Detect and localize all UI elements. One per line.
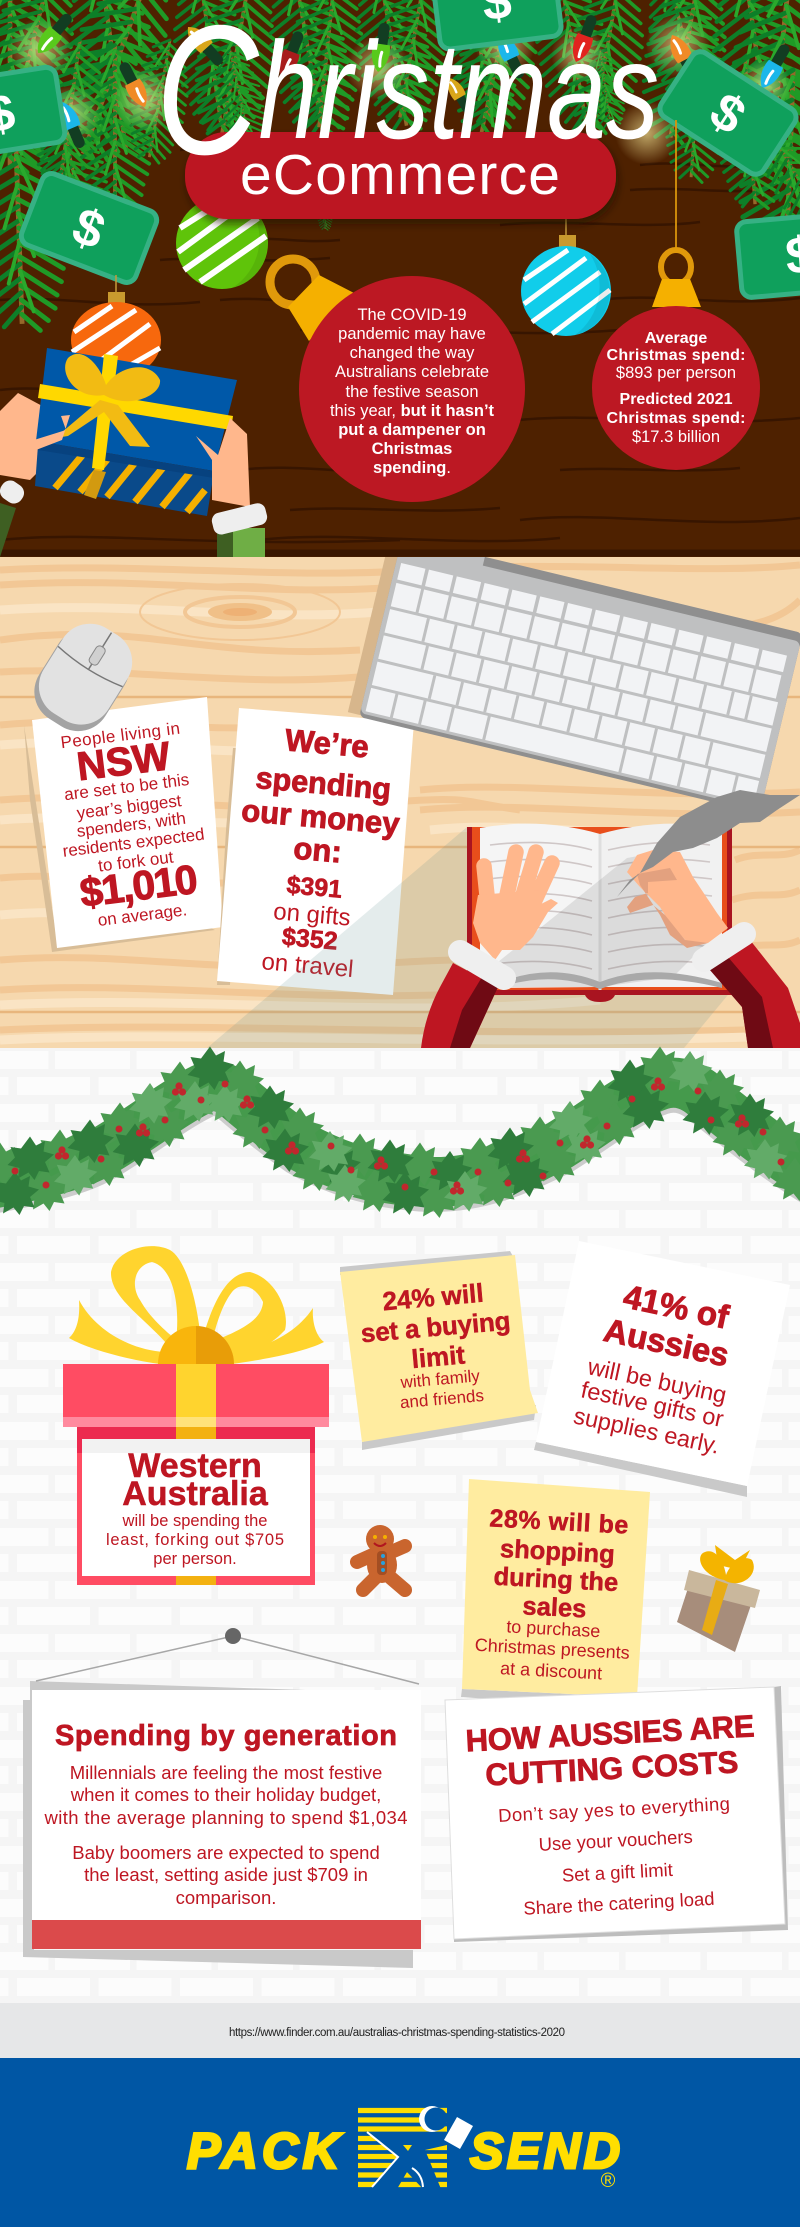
note: we're spending our money on: spending (254, 761, 392, 807)
sticky note: 28% shopping during sales: Christmas presents (474, 1635, 630, 1663)
note: we're spending our money on: $352 (281, 923, 339, 956)
gift box: Western Australia: least, forking out $705 (106, 1531, 284, 1549)
hanging sign: spending by generation: with the average planning to spend $1,034 (44, 1807, 408, 1828)
note: we're spending our money on: on travel (260, 948, 355, 983)
source bar (0, 2003, 800, 2058)
hanging sign: spending by generation (23, 1628, 421, 1968)
note: 41% of Aussies (534, 1241, 790, 1497)
title script: hristmas (259, 15, 659, 168)
mouse (22, 611, 145, 743)
sticky note: 24% buying limit: limit (410, 1339, 466, 1374)
ornament: COVID-19 message: the festive season (346, 383, 478, 401)
hanging sign: spending by generation: the least, setting aside just $709 in (84, 1864, 368, 1885)
note: NSW biggest spenders: on average. (97, 900, 188, 930)
gingerbread man (357, 1525, 405, 1590)
source bar: https://www.finder.com.au/australias-christmas-spending-statistics-2020 (229, 2027, 565, 2039)
hanging sign: spending by generation: Spending by generation (55, 1720, 397, 1752)
sticky note: 24% buying limit: and friends (399, 1386, 485, 1412)
gift box: Western Australia (63, 1246, 329, 1585)
sticky note: 24% buying limit: 24% will (381, 1278, 485, 1316)
note: NSW biggest spenders: to fork out (97, 847, 175, 876)
ornament: COVID-19 message: Australians celebrate (335, 363, 489, 381)
note: we're spending our money on: on: (292, 831, 343, 870)
sticky note: 24% buying limit: set a buying (360, 1305, 512, 1348)
footer band with logo (0, 2058, 800, 2227)
money notes: $ (700, 82, 755, 146)
hanging sign: spending by generation: when it comes to their holiday budget, (70, 1784, 381, 1805)
money notes: $ (65, 197, 113, 261)
section: light wood desk (0, 557, 800, 1048)
note: 41% of Aussies: 41% of (620, 1277, 733, 1336)
present held in hands (0, 348, 269, 557)
section: brick wall (0, 1048, 800, 2003)
hanging sign: spending by generation: Baby boomers are expected to spend (72, 1842, 380, 1863)
ornament: average spend stats: Christmas spend: (606, 410, 746, 427)
pine garland (0, 0, 800, 333)
keyboard (347, 530, 800, 813)
note: NSW biggest spenders: year’s biggest (76, 791, 183, 823)
note: how Aussies are cutting costs: Set a gift limit (561, 1859, 673, 1886)
gift box: Western Australia: Western (128, 1447, 262, 1485)
note: how Aussies are cutting costs: Share the catering load (523, 1888, 715, 1919)
sticky note: 28% shopping during sales: sales (522, 1592, 587, 1624)
gift box: Western Australia: per person. (153, 1550, 237, 1568)
ornament: average spend stats: Average (645, 330, 707, 347)
hanging sign: spending by generation: comparison. (176, 1887, 276, 1908)
note: how Aussies are cutting costs: Use your vouchers (538, 1826, 693, 1855)
gift box: Western Australia: Australia (122, 1475, 269, 1513)
ornament: COVID-19 message: this year, but it hasn’t (330, 402, 495, 420)
ornament: COVID-19 message: put a dampener on (338, 421, 486, 439)
subtitle: eCommerce (240, 143, 560, 207)
note: NSW biggest spenders: NSW (75, 734, 173, 789)
santa hand: left on page (421, 852, 558, 1048)
title (156, 0, 659, 219)
sticky note: 28% shopping during sales (461, 1479, 650, 1709)
ornament: average spend stats: Predicted 2021 (620, 391, 733, 408)
note: NSW biggest spenders: spenders, with (76, 809, 187, 841)
note: we're spending our money on: $391 (285, 871, 343, 904)
note: how Aussies are cutting costs: Don’t say yes to everything (498, 1793, 730, 1826)
small gift (677, 1545, 760, 1652)
note: we're spending our money on (217, 708, 414, 995)
ornament: COVID-19 message (270, 259, 525, 502)
note: how Aussies are cutting costs: HOW AUSSIES ARE (465, 1708, 755, 1759)
hanging sign: spending by generation: Millennials are feeling the most festive (70, 1762, 382, 1783)
note: 41% of Aussies: will be buying (585, 1353, 729, 1408)
note: NSW biggest spenders: residents expected (61, 825, 205, 861)
gift box: Western Australia: will be spending the (122, 1512, 267, 1530)
ornament: COVID-19 message: Christmas (372, 440, 452, 458)
sticky note: 28% shopping during sales: to purchase (506, 1616, 601, 1641)
section: dark wood background (0, 0, 800, 557)
note: we're spending our money on: We’re (284, 722, 370, 765)
money notes (0, 0, 800, 298)
sticky note: 28% shopping during sales: at a discount (500, 1658, 603, 1683)
ornament: COVID-19 message: changed the way (350, 344, 475, 362)
logo emblem (358, 2106, 473, 2189)
ornament: average spend stats: $17.3 billion (632, 428, 720, 446)
ornament: COVID-19 message: The COVID-19 (357, 306, 467, 324)
pill banner (185, 132, 616, 219)
note: 41% of Aussies: Aussies (601, 1311, 732, 1374)
ornament: COVID-19 message: spending. (373, 459, 451, 477)
holly garland (0, 1046, 800, 1218)
ornament: average spend stats: Christmas spend: (606, 347, 746, 364)
fairy lights (8, 13, 792, 165)
shadow cast across desk (207, 827, 732, 1048)
note: 41% of Aussies: festive gifts or (579, 1376, 726, 1432)
sticky note: 28% shopping during sales: 28% will be (489, 1504, 629, 1540)
bow (69, 1246, 324, 1365)
feather (617, 790, 800, 897)
book (467, 824, 732, 1002)
santa hand: right holding quill (617, 790, 800, 1048)
sticky note: 24% buying limit: with family (399, 1366, 481, 1392)
note: NSW biggest spenders (24, 697, 223, 952)
sticky note: 28% shopping during sales: during the (493, 1563, 619, 1597)
note: NSW biggest spenders: are set to be this (63, 770, 190, 804)
bauble: orange (71, 275, 161, 378)
logo wordmark: PACK (187, 2123, 343, 2179)
bauble: green (176, 197, 268, 289)
note: NSW biggest spenders: People living in (60, 719, 181, 752)
sticky note: 28% shopping during sales: shopping (499, 1535, 615, 1569)
note: NSW biggest spenders: $1,010 (77, 856, 200, 916)
note: 41% of Aussies: supplies early. (571, 1402, 722, 1459)
ornament: COVID-19 message: pandemic may have (338, 325, 486, 343)
bauble: blue (521, 218, 611, 336)
sticky note: 24% buying limit (340, 1251, 538, 1450)
note: how Aussies are cutting costs (445, 1686, 788, 1942)
ornament: average spend stats: $893 per person (616, 364, 736, 382)
note: how Aussies are cutting costs: CUTTING COSTS (485, 1744, 739, 1793)
logo wordmark (187, 2123, 620, 2179)
ornament: average spend stats (592, 120, 760, 470)
note: we're spending our money on: on gifts (272, 898, 352, 932)
registered mark: ® (601, 2170, 616, 2192)
logo wordmark: SEND (470, 2123, 620, 2179)
note: we're spending our money on: our money (240, 793, 402, 842)
